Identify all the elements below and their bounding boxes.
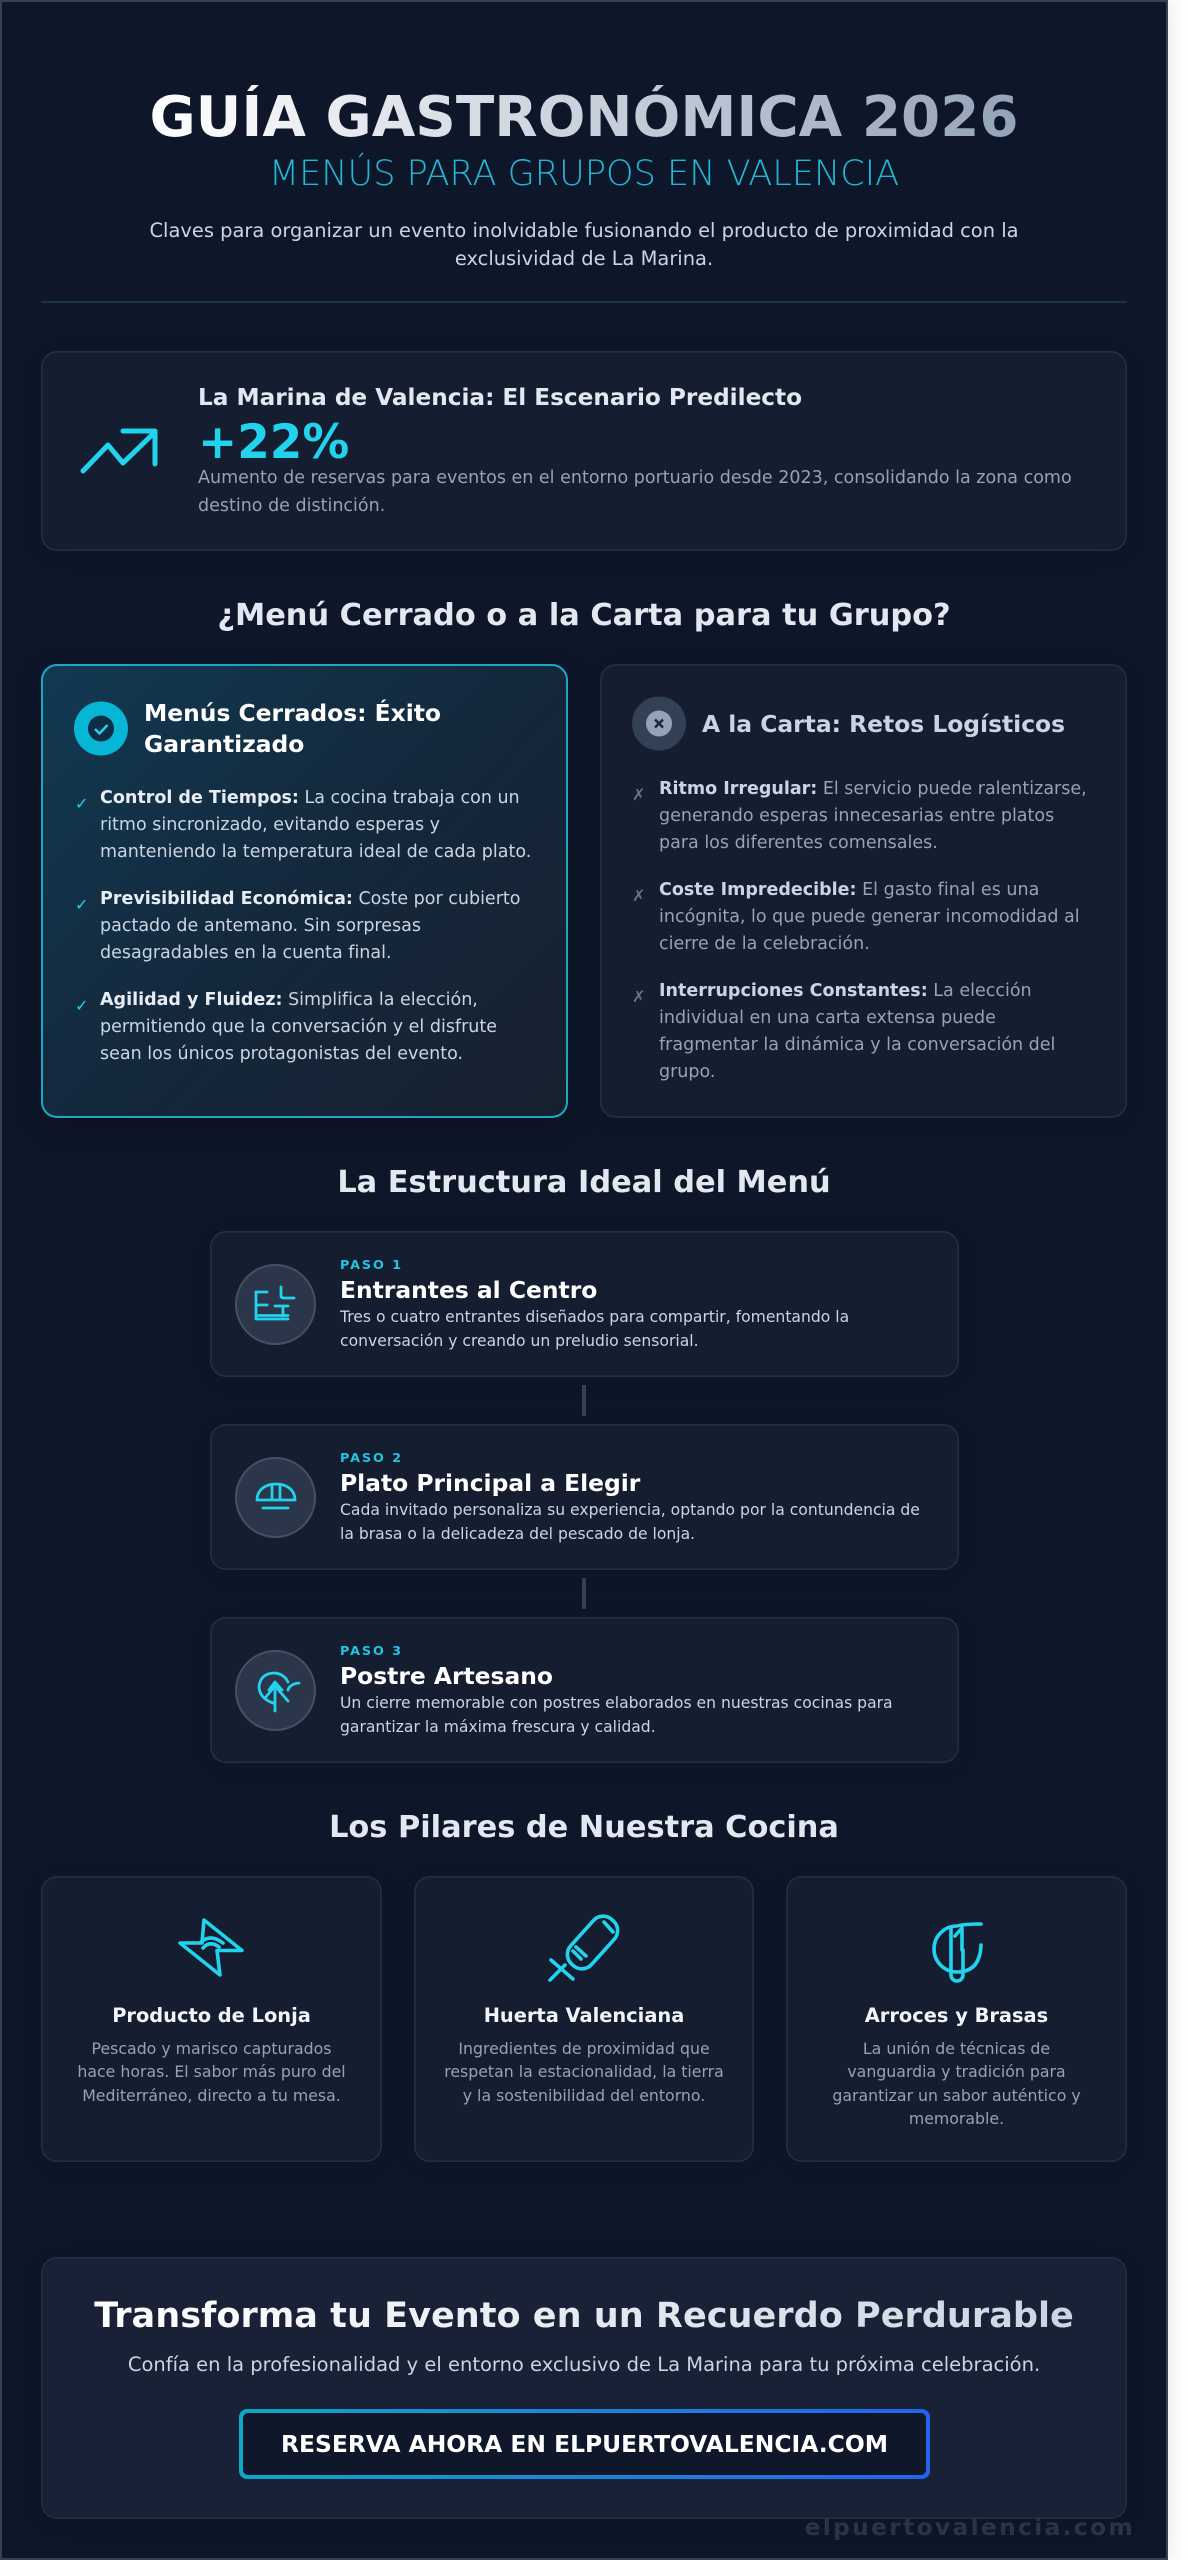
icon: cross: [632, 696, 686, 750]
step description: la brasa o la delicadeza del pescado de lonja.: [340, 1525, 695, 1543]
pillar text: [832, 2039, 1081, 2128]
icon: fish star: [178, 1918, 244, 1977]
icon glyph: starters: [254, 1286, 296, 1320]
step label: PASO 3: [340, 1644, 403, 1659]
connector 2: [582, 1578, 586, 1609]
benefit: económica: pactado de antemano. Sin sorpresas: [100, 916, 421, 936]
CTA title: Transforma tu Evento en un Recuerdo Perdurable: [94, 2295, 1074, 2336]
benefit: agilidad: [75, 990, 497, 1064]
list: benefits: ✓: [75, 794, 88, 812]
heading: pillars: Los Pilares de Nuestra Cocina: [329, 1810, 839, 1845]
benefit: tiempos: manteniendo la temperatura ideal de cada plato.: [100, 842, 531, 862]
benefit: económica: desagradables en la cuenta final.: [100, 943, 392, 963]
list: drawbacks: ✗: [632, 986, 645, 1006]
pillar title: Arroces y Brasas: [865, 2004, 1048, 2027]
benefit: tiempos: ritmo sincronizado, evitando esperas y: [100, 815, 440, 835]
drawback: interrupciones: [632, 980, 1055, 1082]
panel: arroces y brasas: [786, 1876, 1127, 2162]
panel: huerta valenciana: [414, 1876, 754, 2162]
list: benefits: ✓: [75, 894, 88, 914]
benefit: agilidad: Agilidad y Fluidez: Simplifica la elección,: [100, 990, 478, 1010]
drawback: coste: Coste Impredecible: El gasto final es una: [659, 880, 1039, 900]
drawback: interrupciones: Interrupciones Constantes: La elección: [659, 980, 1032, 1000]
icon: check: [74, 702, 128, 756]
pillar text: vanguardia y tradición para: [847, 2062, 1066, 2081]
icon: starters: [235, 1264, 316, 1345]
icon: dessert: [235, 1650, 316, 1731]
step description: Un cierre memorable con postres elaborados en nuestras cocinas para: [340, 1694, 893, 1712]
icon glyph: dessert: [258, 1672, 300, 1712]
step label: PASO 1: [340, 1258, 403, 1273]
drawback: ritmo: Ritmo Irregular: El servicio puede ralentizarse,: [659, 778, 1087, 798]
list: drawbacks: ✗: [632, 784, 645, 804]
card title: A la Carta: Retos Logísticos: [702, 710, 1065, 738]
pillar text: y la sostenibilidad del entorno.: [463, 2086, 705, 2105]
step 1 content: [235, 1258, 849, 1350]
benefit: tiempos: Control de Tiempos: La cocina trabaja con un: [100, 788, 520, 808]
pillar title: Huerta Valenciana: [484, 2004, 684, 2027]
heading: structure: La Estructura Ideal del Menú: [337, 1165, 831, 1200]
pillar text: [444, 2039, 724, 2105]
drawback: interrupciones: fragmentar la dinámica y la conversación del: [659, 1035, 1055, 1055]
pillar text: Ingredientes de proximidad que: [458, 2039, 710, 2058]
benefit: económica: [75, 888, 520, 963]
drawback: interrupciones: grupo.: [659, 1062, 715, 1082]
icon glyph: main course: [256, 1482, 296, 1510]
panel: call to action: [41, 2257, 1127, 2519]
panel: La Marina statistic: [41, 351, 1127, 551]
panel: step 1: [210, 1231, 959, 1377]
CTA button: RESERVA AHORA EN ELPUERTOVALENCIA.COM: [281, 2430, 888, 2458]
list: drawbacks: [632, 778, 1087, 1082]
statistic heading: La Marina de Valencia: El Escenario Predilecto: [198, 384, 802, 411]
intro text: exclusividad de La Marina.: [455, 247, 713, 270]
panel: producto de lonja: [41, 1876, 382, 2162]
pillar text: hace horas. El sabor más puro del: [77, 2062, 346, 2081]
step description: Cada invitado personaliza su experiencia, optando por la contundencia de: [340, 1501, 920, 1519]
step description: [340, 1694, 893, 1736]
drawback: ritmo: para los diferentes comensales.: [659, 833, 938, 853]
drawback: coste: [632, 880, 1080, 954]
card title: Garantizado: [144, 730, 304, 758]
step label: PASO 2: [340, 1451, 403, 1466]
icon: main course: [235, 1457, 316, 1538]
statistic description: destino de distinción.: [198, 496, 385, 516]
step 3 content: [235, 1644, 893, 1736]
list: benefits: [75, 788, 531, 1064]
icon: vegetable: [548, 1914, 620, 1982]
step title: Plato Principal a Elegir: [340, 1469, 640, 1497]
card title: Menús Cerrados: Éxito: [144, 699, 441, 727]
connector 1: [582, 1385, 586, 1416]
CTA text: Confía en la profesionalidad y el entorno exclusivo de La Marina para tu próxima celebración.: [128, 2353, 1040, 2376]
step description: [340, 1501, 920, 1543]
intro text: [149, 219, 1019, 270]
benefit: económica: Previsibilidad Económica: Coste por cubierto: [100, 888, 520, 908]
list: drawbacks: ✗: [632, 886, 645, 904]
statistic value: +22%: [198, 416, 349, 470]
drawback: coste: cierre de la celebración.: [659, 934, 870, 954]
pillar text: respetan la estacionalidad, la tierra: [444, 2062, 724, 2081]
pillar text: memorable.: [909, 2109, 1004, 2128]
drawback: ritmo: generando esperas innecesarias entre platos: [659, 806, 1054, 826]
step description: [340, 1308, 849, 1350]
drawback: coste: incógnita, lo que puede generar incomodidad al: [659, 907, 1080, 927]
pillar text: Mediterráneo, directo a tu mesa.: [82, 2086, 341, 2105]
pillar text: Pescado y marisco capturados: [92, 2039, 331, 2058]
step description: conversación y creando un preludio sensorial.: [340, 1332, 699, 1350]
watermark: elpuertovalencia.com: [805, 2513, 1135, 2541]
benefit: tiempos: [75, 788, 531, 862]
CTA button: [239, 2409, 930, 2479]
step description: Tres o cuatro entrantes diseñados para compartir, fomentando la: [340, 1308, 849, 1326]
icon: rice and fire: [932, 1922, 983, 1983]
statistic description: Aumento de reservas para eventos en el entorno portuario desde 2023, consolidando la zona como: [198, 468, 1072, 488]
pillar title: Producto de Lonja: [112, 2004, 311, 2027]
intro text: Claves para organizar un evento inolvidable fusionando el producto de proximidad con la: [149, 219, 1019, 242]
heading: comparison: ¿Menú Cerrado o a la Carta para tu Grupo?: [217, 598, 951, 633]
benefit: agilidad: permitiendo que la conversación y el disfrute: [100, 1017, 497, 1037]
drawback: ritmo: [632, 778, 1087, 853]
icon: trending up: [80, 428, 158, 474]
panel: menús cerrados: [41, 664, 568, 1118]
title: GUÍA GASTRONÓMICA 2026: [149, 85, 1019, 150]
pillar text: garantizar un sabor auténtico y: [832, 2086, 1081, 2105]
list: benefits: ✓: [75, 996, 88, 1014]
card title: [144, 699, 441, 758]
subtitle: MENÚS PARA GRUPOS EN VALENCIA: [269, 153, 899, 194]
step title: Entrantes al Centro: [340, 1276, 597, 1304]
panel: step 3: [210, 1617, 959, 1763]
step 2 content: [235, 1451, 920, 1543]
drawback: interrupciones: individual en una carta extensa puede: [659, 1008, 996, 1028]
panel: step 2: [210, 1424, 959, 1570]
pillar text: La unión de técnicas de: [863, 2039, 1050, 2058]
header: [149, 85, 1019, 270]
pillar text: [77, 2039, 346, 2105]
step title: Postre Artesano: [340, 1662, 553, 1690]
step description: garantizar la máxima frescura y calidad.: [340, 1718, 656, 1736]
panel: a la carta: [600, 664, 1127, 1118]
statistic description: [198, 468, 1072, 516]
benefit: agilidad: sean los únicos protagonistas del evento.: [100, 1044, 463, 1064]
